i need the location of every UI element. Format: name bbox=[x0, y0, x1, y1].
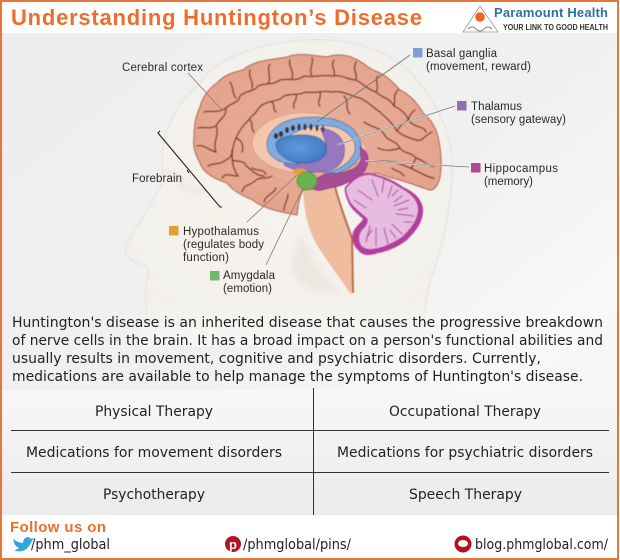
treatment grid: Occupational Therapy bbox=[389, 404, 541, 420]
hippocampus bbox=[313, 147, 368, 190]
label: hypothalamus: (regulates body bbox=[183, 239, 264, 251]
label: amygdala: Amygdala bbox=[223, 270, 276, 282]
caudate striations bbox=[274, 124, 324, 139]
inner pale band bbox=[252, 112, 367, 172]
label: cerebral cortex: Cerebral cortex bbox=[122, 62, 203, 74]
basal ganglia bbox=[267, 117, 362, 176]
cerebellum bbox=[345, 173, 423, 255]
treatment grid bbox=[2, 388, 617, 515]
cortex folds bbox=[197, 58, 434, 210]
brain stem bbox=[303, 187, 353, 295]
treatment grid: Physical Therapy bbox=[95, 404, 213, 420]
logo: YOUR LINK TO GOOD HEALTH bbox=[503, 23, 608, 32]
treatment grid: Medications for psychiatric disorders bbox=[337, 445, 593, 461]
logo: Paramount Health bbox=[494, 5, 608, 20]
label: hippocampus: (memory) bbox=[484, 176, 533, 188]
treatment grid: Medications for movement disorders bbox=[26, 445, 282, 461]
treatment grid: Psychotherapy bbox=[103, 487, 205, 503]
intro paragraph: of nerve cells in the brain. It has a broad impact on a person's functional abilities and bbox=[12, 333, 603, 349]
header bbox=[2, 2, 617, 33]
icon: pinterest: p bbox=[229, 537, 237, 552]
label: cerebral cortex bbox=[122, 62, 222, 110]
intro paragraph: Huntington's disease is an inherited disease that causes the progressive breakdown bbox=[12, 315, 603, 331]
amygdala bbox=[297, 172, 317, 190]
hypothalamus bbox=[293, 168, 307, 176]
blog url: blog.phmglobal.com/ bbox=[475, 537, 608, 553]
label: hippocampus: Hippocampus bbox=[484, 163, 558, 175]
icon: twitter bbox=[13, 537, 34, 551]
illustration: head silhouette bbox=[125, 40, 452, 346]
intro paragraph bbox=[12, 315, 603, 385]
twitter handle: /phm_global bbox=[31, 537, 110, 553]
footer bbox=[2, 515, 617, 558]
thalamus bbox=[284, 128, 344, 172]
label: thalamus bbox=[337, 101, 566, 145]
label: thalamus: Thalamus bbox=[471, 101, 522, 113]
icon: blog bbox=[454, 536, 472, 552]
intro paragraph: usually results in movement, cognitive and psychiatric disorders. Currently, bbox=[12, 351, 541, 367]
label: thalamus: (sensory gateway) bbox=[471, 114, 566, 126]
label: basal ganglia: (movement, reward) bbox=[426, 61, 531, 73]
intro paragraph: medications are available to help manage the symptoms of Huntington's disease. bbox=[12, 369, 583, 385]
label: hippocampus bbox=[365, 161, 558, 188]
logo bbox=[463, 5, 608, 32]
illustration: brain bbox=[194, 55, 441, 295]
footer: Follow us on bbox=[10, 519, 106, 536]
label: forebrain with bracket bbox=[132, 131, 222, 207]
label: hypothalamus: Hypothalamus bbox=[183, 226, 259, 238]
label: basal ganglia: Basal ganglia bbox=[426, 48, 498, 60]
label: amygdala: (emotion) bbox=[223, 283, 272, 295]
label: amygdala bbox=[210, 188, 303, 295]
icon: pinterest bbox=[225, 536, 241, 552]
label: hypothalamus bbox=[169, 175, 297, 264]
label: basal ganglia bbox=[317, 48, 531, 122]
cerebral cortex bbox=[194, 55, 441, 215]
title: Understanding Huntington’s Disease bbox=[11, 5, 422, 30]
label: forebrain with bracket: Forebrain bbox=[132, 173, 182, 185]
treatment grid: Speech Therapy bbox=[409, 487, 522, 503]
label: hypothalamus: function) bbox=[183, 252, 229, 264]
pinterest handle: /phmglobal/pins/ bbox=[243, 537, 351, 553]
